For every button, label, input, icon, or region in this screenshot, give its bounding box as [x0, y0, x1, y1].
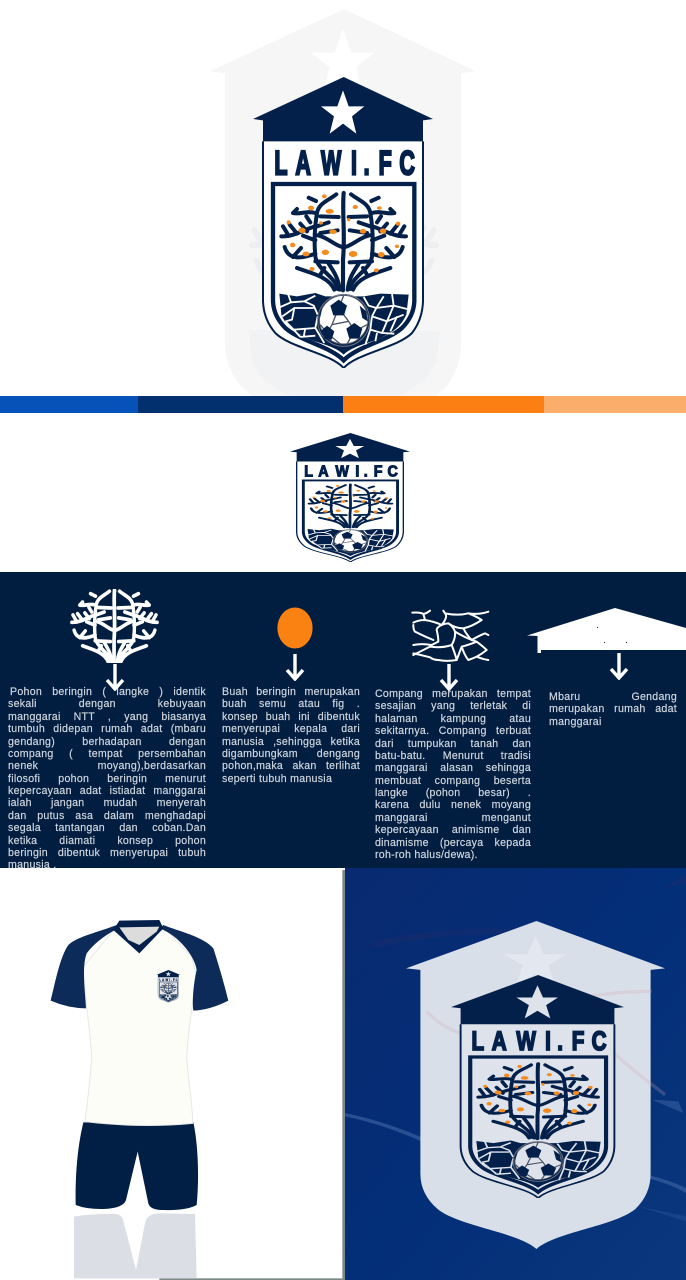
arrow: fruit to text [286, 654, 304, 681]
text: compang: karena dulu nenek moyang [375, 799, 531, 811]
LAWI.FC crest: LAWI.FC [471, 1026, 607, 1057]
text: compang: sekitarnya. Compang terbuat [375, 725, 531, 737]
text: pohon beringin: Pohon beringin ( langke ) identik [10, 686, 206, 698]
light silhouette of crest [406, 921, 665, 1249]
panel: philosophy explanations [0, 572, 686, 868]
text: mbaru gendang [549, 691, 677, 728]
text: compang: manggarai alasan sehingga [375, 762, 531, 774]
shirt badge [156, 970, 180, 1003]
LAWI.FC crest [451, 975, 624, 1198]
text: mbaru gendang: manggarai [549, 716, 602, 728]
text: buah beringin: menyerupai kepala dari [222, 723, 360, 735]
text: pohon beringin: ialah jangan mudah menyerah [8, 797, 206, 809]
icon: orange fig fruit [277, 608, 313, 648]
text: pohon beringin: manusia . [8, 859, 56, 871]
panel: blue background with crest [345, 868, 686, 1280]
text: pohon beringin: ketika diamati konsep pohon [8, 834, 206, 846]
main LAWI.FC crest: LAWI.FC [274, 145, 415, 183]
shirt badge: LAWI.FC [159, 978, 178, 982]
text: buah beringin: pohon,maka akan terlihat [222, 760, 360, 772]
text: mbaru gendang: merupakan rumah adat [549, 703, 677, 715]
shorts [76, 1122, 198, 1210]
kit illustration [50, 870, 345, 1280]
text: pohon beringin: kepercayaan adat istiadat manggarai [8, 785, 206, 797]
right sleeve [160, 925, 228, 1011]
text: buah beringin: seperti tubuh manusia [222, 773, 332, 785]
text: pohon beringin: tumbuh didepan rumah adat (mbaru [8, 723, 206, 735]
text: compang: dinamisme (percaya kepada [375, 836, 531, 848]
text: pohon beringin: gendang) berhadapan dengan [8, 736, 206, 748]
shirt body [83, 927, 197, 1125]
text: buah beringin: buah semu atau fig . [222, 698, 360, 710]
text: pohon beringin: compang ( tempat persembahan [8, 748, 206, 760]
left sleeve [51, 925, 117, 1008]
text: buah beringin: Buah beringin merupakan [222, 686, 360, 698]
text: pohon beringin: nenek moyang),berdasarkan [8, 760, 206, 772]
collar [113, 920, 163, 953]
small LAWI.FC crest: LAWI.FC [304, 464, 398, 480]
text: compang: roh-roh halus/dewa). [375, 849, 478, 861]
colour stripe bar [0, 396, 686, 413]
small LAWI.FC crest [290, 433, 410, 562]
text: compang [375, 688, 531, 861]
text: pohon beringin: manggarai NTT , yang biasanya [8, 711, 206, 723]
text: compang: kepercayaan animisme dan [375, 824, 531, 836]
icon: compang stone pattern [411, 610, 490, 662]
text: compang: langke (pohon besar) . [375, 787, 531, 799]
icon: white banyan tree [70, 589, 159, 663]
icon: mbaru house roof [527, 608, 686, 653]
text: buah beringin: digambungkam dengang [222, 748, 360, 760]
text: compang: batu-batu. Menurut tradisi [375, 750, 531, 762]
text: buah beringin: manusia ,sehingga ketika [222, 736, 360, 748]
text: mbaru gendang: Mbaru Gendang [549, 691, 677, 703]
arrow: house to text [610, 653, 628, 680]
text: pohon beringin: beringin dibentuk menyerupai tubuh [8, 847, 206, 859]
text: pohon beringin: filosofi pohon beringin menurut [8, 773, 206, 785]
text: compang: sesajian yang terletak di [375, 700, 531, 712]
text: compang: Compang merupakan tempat [375, 688, 531, 700]
main LAWI.FC crest [253, 77, 433, 368]
arrow: tree to text [106, 664, 124, 691]
text: compang: dari tumpukan tanah dan [375, 738, 531, 750]
blue background streaks [345, 868, 686, 1222]
text: pohon beringin: dan putus asa dalam menghadapi [8, 810, 206, 822]
reflection of shorts [74, 1213, 197, 1278]
text: pohon beringin [8, 686, 206, 871]
faint watermark logo [212, 10, 474, 396]
arrow: compang to text [440, 664, 458, 691]
text: pohon beringin: segala tantangan dan coban.Dan [8, 822, 206, 834]
panel: football kit [0, 868, 345, 1280]
text: compang: manggarai menganut [375, 812, 531, 824]
faint red streak across silhouette [426, 990, 666, 1096]
text: pohon beringin: sekali dengan kebuyaan [8, 698, 206, 710]
text: buah beringin: konsep buah ini dibentuk [222, 711, 360, 723]
text: compang: halaman kampung atau [375, 713, 531, 725]
text: compang: membuat compang beserta [375, 775, 531, 787]
text: buah beringin [222, 686, 360, 785]
panel: top logo section [0, 0, 686, 396]
